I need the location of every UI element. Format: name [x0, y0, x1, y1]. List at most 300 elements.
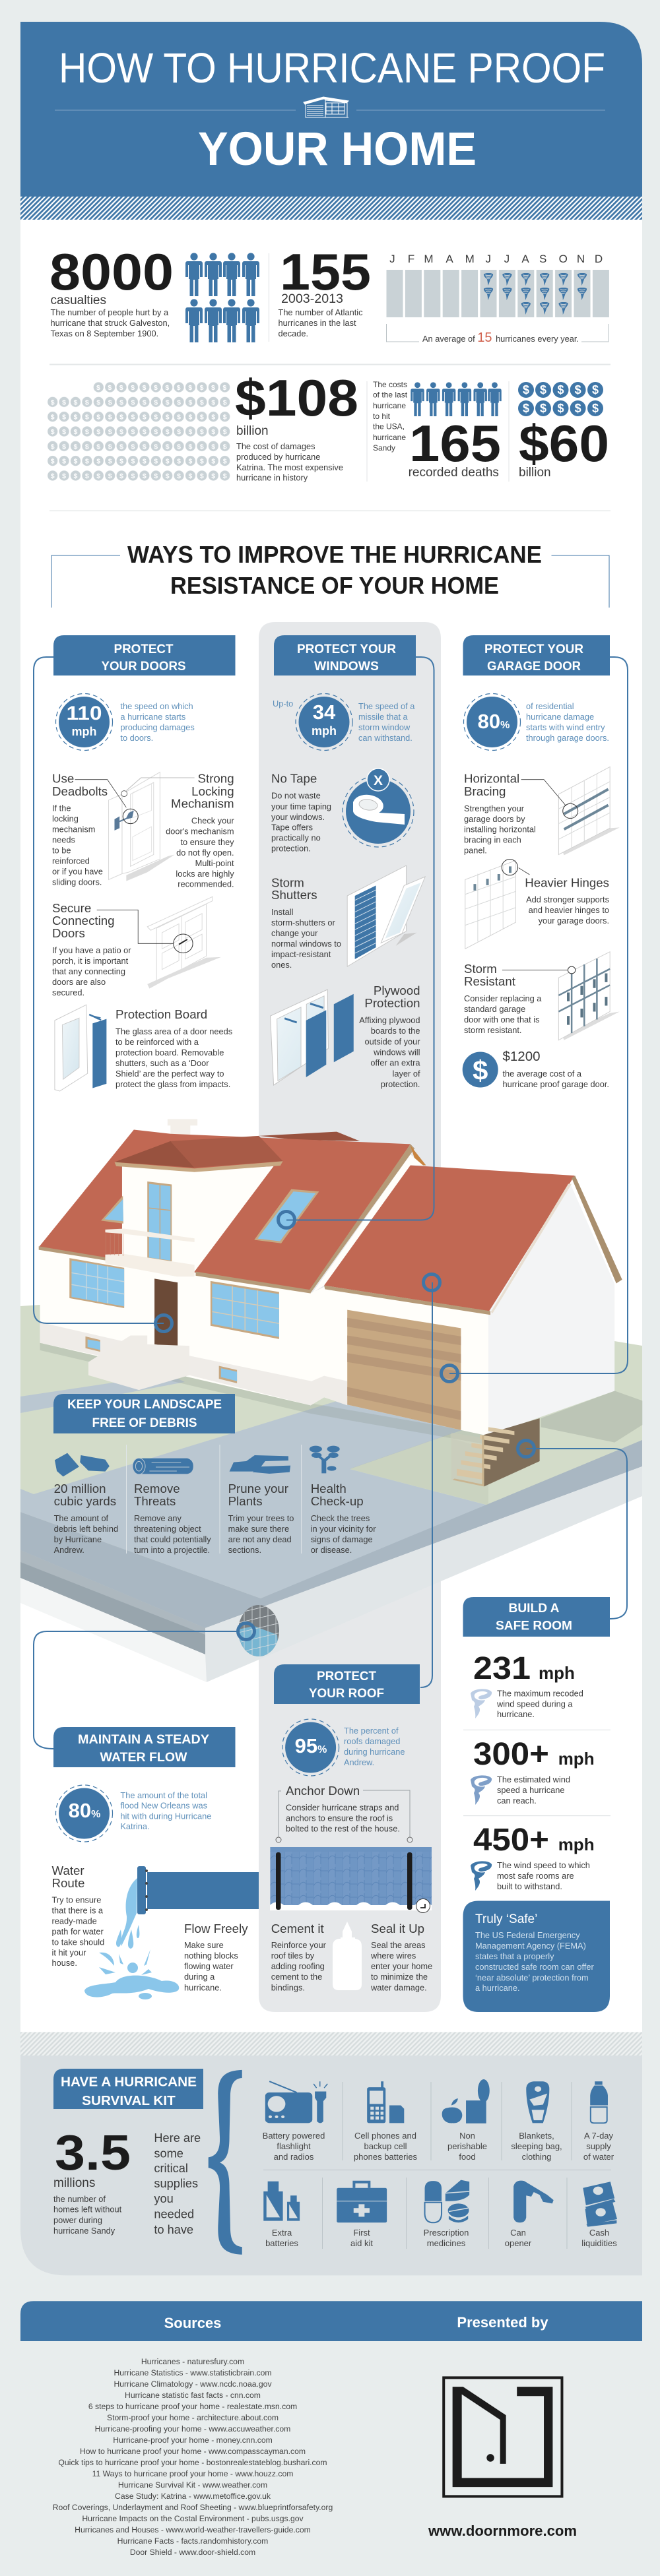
stat text: flood New Orleans was [120, 1801, 207, 1810]
protection board [116, 1007, 232, 1089]
illustration: door with deadbolt [75, 772, 195, 881]
illustration: plywood boards [270, 990, 354, 1085]
icon grid: grey dollar coins: $$$$$$$$$$$$$$$$ [51, 458, 227, 466]
water route: path for water [51, 1926, 104, 1937]
connector: roof [420, 1282, 432, 1687]
text: health check-up: Check-up [311, 1494, 364, 1508]
header: WATER FLOW [100, 1751, 187, 1765]
text: costs of hurricane Sandy [373, 380, 408, 453]
stat badge 110 mph: mph [71, 725, 96, 738]
header: WINDOWS [314, 660, 379, 674]
protection board: to be reinforced with a [116, 1037, 199, 1047]
stat: 8000 casualties [50, 243, 174, 338]
flow freely: flowing water [184, 1961, 234, 1971]
cement it [271, 1922, 327, 1992]
label: Cell phones and [354, 2131, 416, 2141]
strong locking mechanism: Strong [198, 772, 234, 786]
icon grid: grey dollar coins: $$$$$$$$$$$$ [96, 384, 226, 392]
wind speed 300+ mph [471, 1737, 595, 1806]
icon: eight people [185, 253, 259, 342]
strong locking mechanism: Check your [191, 816, 234, 826]
panel: protect your windows [270, 635, 425, 1089]
header: HAVE A HURRICANE [61, 2075, 197, 2090]
strong locking mechanism: do not fly open. [176, 848, 234, 858]
header: YOUR DOORS [102, 660, 186, 674]
stat text: starts with wind entry [526, 722, 605, 732]
plywood protection: layer of [393, 1069, 420, 1079]
text block: sources list: Roof Coverings, Underlayment and Roof Sheeting - www.blueprintforsafety.org [53, 2503, 333, 2512]
plywood protection: outside of your [365, 1037, 420, 1046]
stat badge 95% [282, 1719, 339, 1776]
text block: sources list: Hurricane Impacts on the Costal Environment - pubs.usgs.gov [82, 2514, 304, 2523]
label [581, 2228, 617, 2248]
wind speed 300+ mph: The estimated wind [497, 1775, 570, 1784]
stat: 155 hurricanes: 2003-2013 [281, 292, 343, 306]
connector: doors to front door [34, 657, 164, 1323]
stat text: The percent of [344, 1726, 399, 1736]
text: remove threats: Threats [134, 1494, 176, 1508]
water route: that there is a [51, 1906, 104, 1916]
stat: 155 hurricanes: The number of Atlantic [279, 307, 363, 317]
water route: it hit your [51, 1948, 86, 1958]
text: prune your plants: sections. [228, 1545, 261, 1555]
wind speed 300+ mph: can reach. [497, 1796, 537, 1806]
stat badge 34 mph: 34 [313, 701, 336, 724]
chart: hurricanes per month: A [521, 253, 529, 265]
stat: $108 billion: hurricane in history [236, 472, 308, 483]
icon: cell phone and battery [367, 2081, 404, 2123]
text: here are some critical supplies: to have [154, 2223, 193, 2236]
cement it: adding roofing [271, 1961, 325, 1971]
chart: hurricanes per month [387, 253, 609, 345]
label: Can [510, 2228, 526, 2238]
stat: 155 hurricanes [279, 243, 371, 338]
heavier hinges: your garage doors. [539, 916, 609, 926]
illustration: ground platform [20, 1305, 642, 1682]
chart: hurricanes per month: N [577, 253, 585, 265]
stat: 8000 casualties: The number of people hurt by a [50, 307, 169, 317]
icon: blue dollar coins [518, 382, 603, 416]
panel: protect your doors [52, 635, 235, 1091]
seal it up: Seal the areas [371, 1940, 426, 1950]
protection board: protection board. Removable [116, 1048, 224, 1057]
left eave trim [39, 1246, 106, 1261]
stat badge 80% [55, 1785, 112, 1842]
header: BUILD A [508, 1602, 560, 1616]
stat text: storm window [358, 722, 411, 732]
wind speed 231 mph: The maximum recoded [497, 1689, 583, 1698]
storm shutters [271, 876, 341, 970]
back roof [259, 1132, 360, 1141]
stat text: during hurricane [344, 1747, 405, 1757]
label: phones batteries [354, 2152, 418, 2162]
header [53, 635, 235, 675]
chart: hurricanes per month: M [424, 253, 434, 265]
header [53, 1727, 235, 1767]
text block: sources list: Storm-proof your home - architecture.about.com [107, 2413, 279, 2422]
strong locking mechanism: recommended. [178, 879, 234, 889]
plywood protection: Affixing plywood [359, 1015, 420, 1025]
icon grid: grey dollar coins [47, 380, 230, 483]
text: health check-up: signs of damage [311, 1534, 373, 1544]
icon: cement bottle [333, 1922, 362, 1990]
plywood protection: boards to the [371, 1026, 420, 1036]
label: supply [586, 2141, 611, 2151]
stat: $108 billion: $108 [235, 369, 358, 427]
stat: $1200: hurricane proof garage door. [503, 1079, 609, 1089]
text: 20 million cubic yards: debris left behind [54, 1524, 118, 1534]
cement it: Cement it [271, 1922, 324, 1935]
use deadbolts: needs [52, 835, 75, 845]
storm resistant: standard garage [464, 1004, 525, 1014]
header: SURVIVAL KIT [82, 2093, 176, 2108]
illustration: shutter window [347, 865, 425, 966]
text: health check-up: in your vicinity for [311, 1524, 376, 1534]
icon: radio and flashlight [265, 2081, 327, 2123]
no tape: practically no [271, 833, 321, 843]
text: prune your plants: Plants [228, 1494, 263, 1508]
text: costs of hurricane Sandy: the USA, [373, 422, 405, 431]
secure connecting doors: Connecting [52, 914, 115, 927]
use deadbolts: reinforced [52, 856, 90, 865]
stat text [344, 1726, 405, 1767]
no tape: protection. [271, 844, 311, 854]
text: here are some critical supplies: some [154, 2147, 183, 2160]
header [463, 635, 610, 675]
text block: sources list [53, 2357, 333, 2557]
wind speed 231 mph: hurricane. [497, 1709, 535, 1719]
secure connecting doors: Doors [52, 926, 85, 940]
label [511, 2131, 562, 2162]
icon: cash [583, 2182, 617, 2227]
secure connecting doors: porch, it is important [52, 956, 129, 966]
icon: tree [310, 1446, 340, 1473]
section heading: ways to improve: RESISTANCE OF YOUR HOME [170, 572, 499, 599]
stat: 155 hurricanes: hurricanes in the last [279, 318, 356, 328]
icon: batteries [263, 2182, 300, 2221]
text: remove threats: Remove [134, 1482, 180, 1495]
stat text: producing damages [120, 722, 195, 732]
chart: hurricanes per month: J [389, 253, 395, 265]
seal it up: where wires [370, 1951, 416, 1961]
header: GARAGE DOOR [487, 660, 581, 674]
stat badge 110 mph: 110 [66, 703, 102, 724]
label: First [353, 2228, 370, 2238]
plywood protection: windows will [373, 1048, 420, 1057]
flow freely: Flow Freely [184, 1922, 248, 1935]
stat text: Katrina. [120, 1821, 150, 1831]
horizontal bracing: garage doors by [464, 814, 525, 824]
stat text [526, 701, 609, 743]
icon grid: grey dollar coins: $$$$$$$$$$$$$$$$ [51, 443, 227, 451]
use deadbolts: locking [52, 814, 79, 823]
plywood protection: Protection [364, 996, 420, 1010]
text block: sources list: Hurricanes - naturesfury.com [141, 2357, 244, 2366]
title line one: HOW TO HURRICANE PROOF [59, 44, 605, 92]
label [265, 2228, 298, 2248]
text: remove threats [134, 1482, 211, 1555]
header: MAINTAIN A STEADY [78, 1733, 209, 1747]
use deadbolts: or if you have [52, 866, 103, 876]
header: SAFE ROOM [496, 1619, 572, 1633]
label [505, 2228, 532, 2248]
chart: hurricanes per month: O [559, 253, 568, 265]
stat: $108 billion [235, 369, 358, 483]
text: here are some critical supplies: supplies [154, 2177, 198, 2190]
secure connecting doors: doors are also [52, 977, 106, 987]
text: costs of hurricane Sandy: to hit [373, 412, 391, 421]
stat: $108 billion: produced by hurricane [236, 452, 320, 462]
header: PROTECT YOUR [484, 643, 583, 656]
text: here are some critical supplies [154, 2131, 201, 2236]
no tape: No Tape [271, 772, 317, 786]
label: flashlight [277, 2141, 311, 2151]
water route: Route [51, 1876, 84, 1890]
text: costs of hurricane Sandy: hurricane [373, 433, 406, 442]
seal it up: enter your home [371, 1961, 432, 1971]
header: KEEP YOUR LANDSCAPE [67, 1398, 222, 1412]
text: here are some critical supplies: you [154, 2192, 174, 2205]
flow freely: during a [184, 1972, 215, 1982]
stat text: hit with during Hurricane [120, 1811, 211, 1821]
panel: protect your roof [270, 1664, 432, 1992]
protection board: Protection Board [116, 1007, 207, 1021]
seal it up: Seal it Up [371, 1922, 424, 1935]
icon grid: grey dollar coins: $$$$$$$$$$$$$$$$ [51, 398, 227, 406]
chimney [168, 1119, 197, 1141]
wind speed 231 mph: 231 [473, 1651, 531, 1686]
protection board: The glass area of a door needs [116, 1026, 232, 1036]
icon: curly brace [209, 2070, 242, 2255]
strong locking mechanism [166, 772, 234, 889]
header [463, 1597, 610, 1637]
icon: six people [411, 382, 502, 416]
label: Blankets, [519, 2131, 554, 2141]
flow freely: nothing blocks [184, 1951, 238, 1961]
white content panel [20, 197, 642, 2057]
horizontal bracing [464, 772, 536, 856]
text block: sources list: Hurricane Facts - facts.randomhistory.com [117, 2536, 268, 2546]
wind speed 300+ mph: 300+ [473, 1737, 549, 1772]
label: Non [459, 2131, 475, 2141]
icon: first aid kit [337, 2182, 387, 2222]
stat badge 95%: 95% [295, 1734, 327, 1757]
illustration: bracing panel [521, 767, 620, 855]
text: 20 million cubic yards: by Hurricane [54, 1534, 102, 1544]
anchor down: Consider hurricane straps and [286, 1802, 399, 1813]
illustration: door with board [55, 1005, 106, 1091]
storm shutters: ones. [271, 960, 292, 970]
label [263, 2131, 325, 2162]
stat badge 34 mph [273, 694, 352, 751]
wind speed 450+ mph: most safe rooms are [497, 1871, 574, 1881]
stat text: The speed of a [358, 701, 415, 711]
stat: 155 hurricanes: decade. [279, 329, 308, 338]
flow freely: Make sure [184, 1940, 224, 1950]
section heading: ways to improve: WAYS TO IMPROVE THE HURRICANE [127, 541, 542, 568]
storm resistant: storm resistant. [464, 1025, 521, 1035]
protection board: shutters, such as a ‘Door [116, 1058, 209, 1068]
text: prune your plants: Trim your trees to [228, 1513, 294, 1523]
label: opener [505, 2238, 532, 2248]
stat: 8000 casualties: 8000 [50, 243, 174, 301]
callout: truly safe: a hurricane. [475, 1983, 520, 1993]
text: 20 million cubic yards: 20 million [54, 1482, 106, 1495]
text: costs of hurricane Sandy: of the last [373, 391, 408, 400]
icon grid: grey dollar coins: $$$$$$$$$$$$$$$$ [51, 428, 227, 436]
stat: $108 billion: billion [236, 424, 269, 438]
use deadbolts [52, 772, 108, 887]
chart caption: An average of 15 hurricanes every year. [422, 330, 579, 345]
stat: $108 billion: The cost of damages [236, 441, 315, 451]
flow freely: hurricane. [184, 1982, 222, 1992]
use deadbolts: If the [52, 803, 71, 813]
storm shutters: Install [271, 907, 293, 917]
illustration: storm resistant panel [502, 952, 620, 1040]
horizontal bracing: Bracing [464, 784, 506, 798]
label: Extra [272, 2228, 292, 2238]
roof skylight [254, 1189, 319, 1243]
storm resistant: Resistant [464, 974, 516, 988]
header: FREE OF DEBRIS [92, 1416, 197, 1430]
label: Cash [589, 2228, 609, 2238]
panel: build a safe room [463, 1597, 610, 2012]
entry steps [88, 1336, 189, 1390]
header [53, 1394, 235, 1433]
footer bar: sources and presented by: Sources [164, 2315, 221, 2331]
seal it up [370, 1922, 432, 1992]
balcony [105, 1228, 195, 1242]
stat: $1200 [463, 1049, 609, 1089]
storm shutters: Storm [271, 876, 304, 890]
water route: to take should [51, 1937, 104, 1947]
strong locking mechanism: door's mechanism [166, 827, 234, 836]
wind speed 450+ mph: mph [558, 1835, 595, 1854]
icon grid: grey dollar coins: $$$$$$$$$$$$$$$$ [51, 472, 227, 480]
dormer window [101, 1195, 123, 1224]
text: health check-up: or disease. [311, 1545, 352, 1555]
label [447, 2131, 487, 2162]
heavier hinges [525, 876, 609, 926]
connector: water route [34, 1631, 246, 1749]
water route: ready-made [51, 1916, 97, 1926]
strong locking mechanism: Locking [191, 784, 234, 798]
icon: debris rocks [55, 1453, 110, 1476]
text: 20 million cubic yards: Andrew. [54, 1545, 84, 1555]
label: medicines [427, 2238, 466, 2248]
title line two: YOUR HOME [198, 123, 477, 175]
main roof [39, 1129, 411, 1292]
header: PROTECT [114, 643, 174, 656]
panel: maintain a steady water flow [51, 1727, 259, 1999]
stat text: Andrew. [344, 1757, 374, 1767]
wind speed 450+ mph: The wind speed to which [497, 1860, 590, 1870]
icon: tape [343, 769, 414, 847]
stat text: of residential [526, 701, 574, 711]
heavier hinges: and heavier hinges to [529, 905, 609, 915]
garage side wall [487, 1184, 614, 1436]
stat: $1200: $ [473, 1055, 488, 1086]
label: of water [583, 2152, 614, 2162]
secure connecting doors [52, 901, 131, 997]
stat badge 34 mph: mph [312, 724, 337, 738]
chart: hurricanes per month: A [446, 253, 453, 265]
header: PROTECT [317, 1670, 376, 1683]
text: 20 million cubic yards: The amount of [54, 1513, 109, 1523]
label: and radios [274, 2152, 314, 2162]
stat text: The amount of the total [120, 1790, 207, 1800]
text: 20 million cubic yards: cubic yards [54, 1494, 116, 1508]
connector: safe room [526, 1449, 627, 1619]
icon: pruning shears [230, 1455, 290, 1474]
label: sleeping bag, [511, 2141, 562, 2151]
cement it: cement to the [271, 1972, 322, 1982]
garage roof [324, 1166, 575, 1311]
storm resistant: door with one that is [464, 1015, 540, 1024]
text block: sources list: Hurricane statistic fast facts - cnn.com [125, 2391, 261, 2400]
water route: house. [51, 1958, 77, 1968]
chart: hurricanes per month: S [539, 253, 546, 265]
storm shutters: normal windows to [271, 939, 341, 949]
wind speed 450+ mph [471, 1823, 595, 1891]
text: remove threats: threatening object [134, 1524, 201, 1534]
wind speed 450+ mph: 450+ [473, 1823, 549, 1858]
stat: 165 recorded deaths: 165 [409, 414, 501, 472]
anchor down: bolted to the rest of the house. [286, 1824, 400, 1834]
heavier hinges: Add stronger supports [526, 895, 609, 904]
label: food [459, 2152, 476, 2162]
text block: sources list: How to hurricane proof your home - www.compasscayman.com [80, 2447, 306, 2456]
section heading: ways to improve [51, 541, 609, 608]
water route: Try to ensure [51, 1895, 101, 1905]
callout: truly safe: constructed safe room can offer [475, 1962, 594, 1972]
stat: 3.5 millions: 3.5 [55, 2125, 131, 2180]
stat badge 80% [463, 694, 520, 751]
chart: hurricanes per month: M [465, 253, 475, 265]
stat: 3.5 millions [53, 2125, 131, 2236]
stat text: a hurricane starts [120, 712, 185, 722]
protection board: Shield’ are the perfect way to [116, 1069, 224, 1079]
icon: medicines [425, 2180, 469, 2222]
illustration: stairs under garage [451, 1418, 540, 1486]
front wall [40, 1249, 488, 1436]
storm shutters: Shutters [271, 888, 317, 902]
stat: $1200: $1200 [503, 1049, 541, 1064]
panel: keep your landscape free of debris [53, 1394, 376, 1555]
no tape: your time taping [271, 801, 331, 811]
stat: 8000 casualties: hurricane that struck Galveston, [50, 318, 170, 328]
text: costs of hurricane Sandy: The costs [373, 380, 407, 389]
label [350, 2228, 373, 2248]
label: perishable [447, 2141, 487, 2151]
stat: 8000 casualties: casualties [50, 294, 106, 307]
text block: sources list: Case Study: Katrina - www.metoffice.gov.uk [115, 2492, 271, 2501]
stat badge 34 mph: Up-to [273, 699, 293, 708]
text: health check-up: Health [311, 1482, 346, 1495]
callout: truly safe: states that a properly [475, 1951, 554, 1961]
label: A 7-day [584, 2131, 614, 2141]
stat badge 80%: 80% [478, 710, 510, 733]
text: costs of hurricane Sandy: Sandy [373, 443, 395, 453]
logo [444, 2377, 562, 2496]
strong locking mechanism: Multi-point [195, 858, 234, 868]
panel: survival kit [20, 2056, 642, 2275]
storm resistant: Storm [464, 962, 497, 976]
icon: house [304, 97, 348, 117]
text block: sources list: Door Shield - www.door-shield.com [130, 2548, 255, 2557]
plywood protection [359, 984, 420, 1089]
secure connecting doors: secured. [52, 988, 84, 997]
